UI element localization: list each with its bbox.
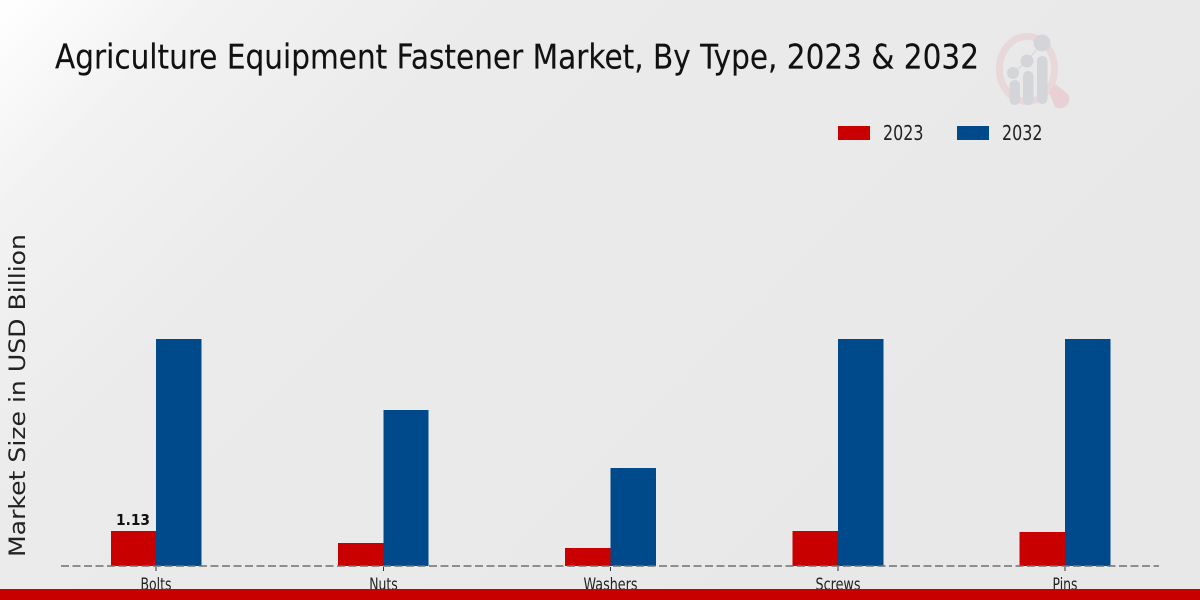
bars: Bolts (111, 339, 202, 566)
legend (838, 121, 1042, 145)
x axis category labels: Screws (816, 575, 861, 595)
bars: Pins (1020, 339, 1110, 566)
x axis category labels: Washers (584, 575, 638, 595)
x axis category labels: Nuts (369, 575, 398, 595)
bar chart (61, 339, 1159, 595)
title: Agriculture Equipment Fastener Market, By Type, 2023 & 2032 (55, 38, 979, 76)
footer bar (0, 589, 1200, 600)
legend item: 2032: 2032 (1002, 121, 1042, 145)
x axis category labels: Pins (1052, 575, 1078, 595)
y axis label: Market Size in USD Billion (5, 234, 31, 557)
x axis category labels: Bolts (140, 575, 172, 595)
bars: Washers (565, 468, 656, 566)
data label: 1.13: 1.13 (116, 511, 150, 529)
icon: watermark magnifier with bars (1000, 34, 1069, 108)
legend item: 2032 (957, 121, 1042, 145)
legend item: 2023: 2023 (883, 121, 924, 145)
x axis category labels (140, 575, 1078, 595)
bars: Screws (792, 339, 884, 566)
legend item: 2023 (838, 121, 924, 145)
bars: Nuts (338, 410, 428, 566)
